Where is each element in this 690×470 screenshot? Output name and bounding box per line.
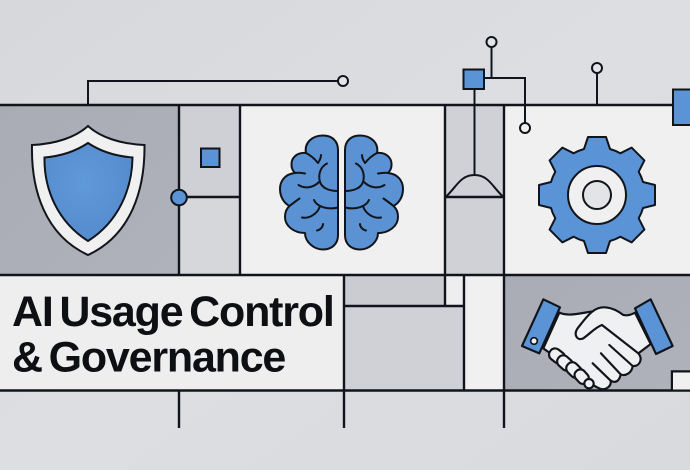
icon: right edge blue square: [673, 90, 690, 125]
icon: gate dome with stem: [446, 89, 504, 197]
connector: branch from blue square to nodes: [484, 37, 530, 133]
right hemisphere: [345, 136, 403, 250]
icon: brain: [280, 136, 403, 250]
connector: top left line with node: [88, 76, 348, 105]
icon: small blue square: [201, 148, 220, 167]
icon: handshake: [522, 299, 673, 389]
panel: small square cell: [179, 105, 240, 197]
cuff button: [531, 338, 537, 344]
icon: gear: [539, 137, 655, 253]
icon: shield: [32, 126, 145, 255]
left cuff: [522, 299, 560, 353]
panel: lower grey cell: [344, 306, 464, 390]
panel: gate column: [445, 105, 504, 275]
left hemisphere: [280, 136, 338, 250]
panel: lower connector cell: [179, 197, 240, 275]
panel: title background: [0, 275, 344, 390]
title: [12, 288, 334, 382]
connector: gear top node: [592, 63, 602, 105]
right cuff: [635, 299, 673, 354]
panel: upper grey cell: [344, 275, 445, 306]
title: AI Usage Control: [12, 288, 334, 336]
icon: blue square on gate stem: [464, 70, 484, 89]
thumb and fingers: [576, 311, 638, 353]
panel corner: white box: [673, 372, 690, 390]
grid lines: [0, 105, 690, 428]
icon: blue junction node: [171, 190, 187, 205]
panel: brain background: [240, 105, 445, 275]
panel: small white cell: [445, 275, 464, 306]
title: & Governance: [12, 334, 285, 382]
knuckles: [547, 346, 594, 388]
panel: shield background: [0, 105, 179, 275]
panel: handshake background: [504, 275, 690, 390]
panel: gear background: [504, 105, 690, 275]
hands: [543, 307, 651, 389]
panel: narrow white cell: [464, 275, 504, 390]
